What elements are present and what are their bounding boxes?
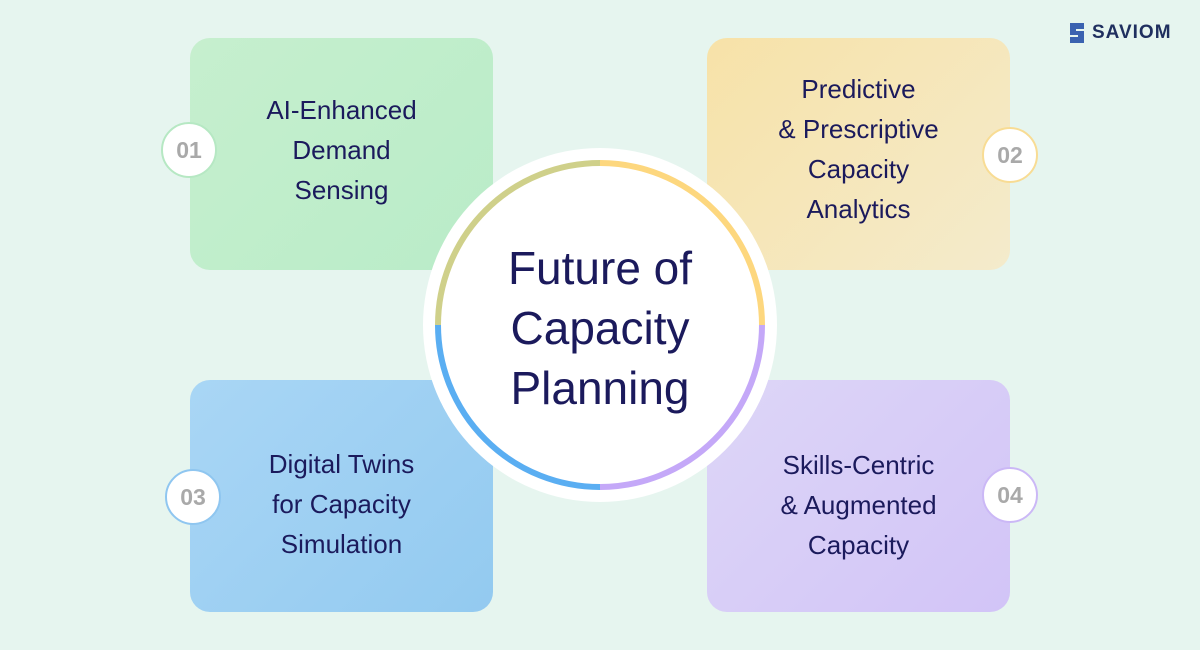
card 02: Predictive (801, 74, 916, 104)
card 01: Demand (292, 135, 391, 165)
card 04: & Augmented (780, 490, 937, 520)
icon: logo mark (1070, 23, 1084, 43)
card 03: for Capacity (272, 489, 411, 519)
center title (508, 242, 692, 414)
badge 02 (982, 127, 1038, 183)
card 02: & Prescriptive (778, 114, 939, 144)
logo text: SAVIOM (1092, 22, 1172, 43)
badge 02: 02 (997, 142, 1023, 168)
center title: Planning (510, 362, 690, 414)
card 03: Simulation (281, 529, 402, 559)
badge 03 (165, 469, 221, 525)
card 03 (190, 380, 493, 612)
badge 01 (161, 122, 217, 178)
badge 03: 03 (180, 484, 206, 510)
card 04: Capacity (808, 530, 909, 560)
card 01 (190, 38, 493, 270)
center title: Capacity (511, 302, 689, 354)
card 02: Analytics (806, 194, 911, 224)
card 02: Capacity (808, 154, 909, 184)
center title: Future of (508, 242, 692, 294)
card 01: AI-Enhanced (266, 95, 417, 125)
card 03: Digital Twins (269, 449, 414, 479)
card 04: Skills-Centric (783, 450, 934, 480)
logo (1070, 22, 1172, 43)
card 04 (707, 380, 1010, 612)
badge 01: 01 (176, 136, 202, 162)
badge 04 (982, 467, 1038, 523)
card 01: Sensing (294, 175, 388, 205)
card 02 (707, 38, 1010, 270)
badge 04: 04 (997, 482, 1023, 508)
